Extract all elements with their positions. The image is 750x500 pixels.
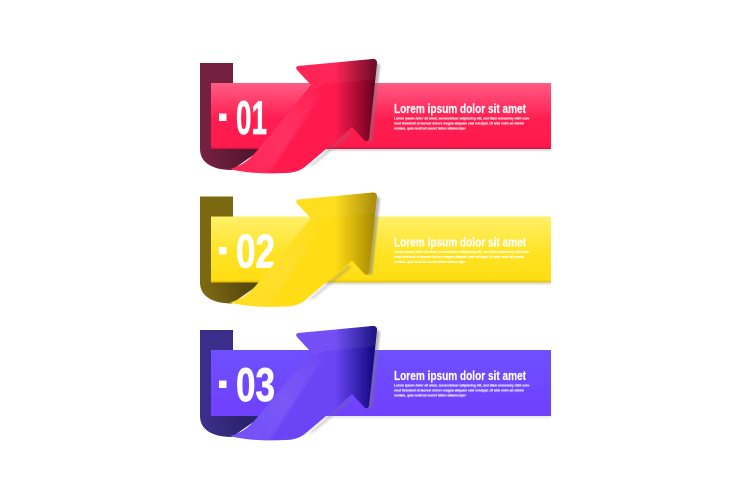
- body text: Lorem ipsum dolor sit amet, consectetuer adipiscing elit, sed diam nonummy nibh euis-: [394, 382, 531, 388]
- row 3: purple step: [200, 322, 551, 442]
- dark tab bottom: [200, 416, 262, 437]
- arrow head shading: [338, 326, 377, 408]
- arrow shadow: [308, 196, 380, 300]
- shaft highlight: [232, 362, 314, 440]
- body text: mod tincidunt ut laoreet dolore magna aliquam erat volutpat. Ut wisi enim ad minim: [394, 120, 524, 126]
- arrow head shading: [338, 192, 377, 275]
- heading: Lorem ipsum dolor sit amet: [394, 234, 527, 250]
- arrow head shading: [337, 59, 377, 142]
- shaft highlight: [232, 223, 318, 306]
- bar shadow: [325, 416, 551, 418]
- body text: veniam, quis nostrud exerci tation ullamcorper: [394, 126, 466, 130]
- body text: Lorem ipsum dolor sit amet, consectetuer adipiscing elit, sed diam nonummy nibh euis-: [394, 249, 531, 254]
- row 2: yellow step: [200, 188, 551, 308]
- dark folded tab: [200, 196, 233, 282]
- body text: mod tincidunt ut laoreet dolore magna aliquam erat volutpat. Ut wisi enim ad minim: [394, 254, 524, 259]
- arrow head top highlight: [296, 327, 377, 356]
- dark tab bottom: [200, 149, 262, 170]
- body text: Lorem ipsum dolor sit amet, consectetuer adipiscing elit, sed diam nonummy nibh euis-: [394, 116, 531, 120]
- banner: [211, 350, 551, 416]
- bar shadow: [325, 282, 551, 284]
- bar shadow: [325, 149, 551, 151]
- body text: mod tincidunt ut laoreet dolore magna aliquam erat volutpat. Ut wisi enim ad minim: [394, 388, 524, 392]
- banner: [211, 83, 551, 149]
- body text: veniam, quis nostrud exerci tation ullamcorper: [394, 259, 466, 264]
- heading: Lorem ipsum dolor sit amet: [394, 368, 527, 383]
- body text: [394, 249, 531, 264]
- body text: veniam, quis nostrud exerci tation ullamcorper: [394, 392, 466, 398]
- dark folded tab: [200, 63, 233, 149]
- step number: 02: [236, 224, 275, 278]
- arrow head top highlight: [296, 194, 377, 222]
- step number: [219, 224, 275, 278]
- dark tab bottom: [200, 282, 262, 304]
- step number: 03: [236, 358, 275, 411]
- arrow: [230, 326, 377, 440]
- arrow shadow: [308, 329, 380, 434]
- step number: [219, 91, 267, 144]
- heading: Lorem ipsum dolor sit amet: [394, 101, 527, 116]
- arrow head top highlight: [296, 60, 377, 88]
- dark folded tab: [200, 330, 233, 416]
- shaft highlight: [232, 90, 318, 173]
- row 1: red step: [200, 55, 551, 175]
- arrow: [230, 59, 377, 174]
- body text: [394, 116, 531, 130]
- body text: [394, 382, 531, 398]
- arrow shadow: [308, 62, 380, 167]
- step number: 01: [236, 91, 267, 144]
- banner: [211, 216, 551, 282]
- step number: [219, 358, 275, 411]
- arrow: [230, 192, 377, 307]
